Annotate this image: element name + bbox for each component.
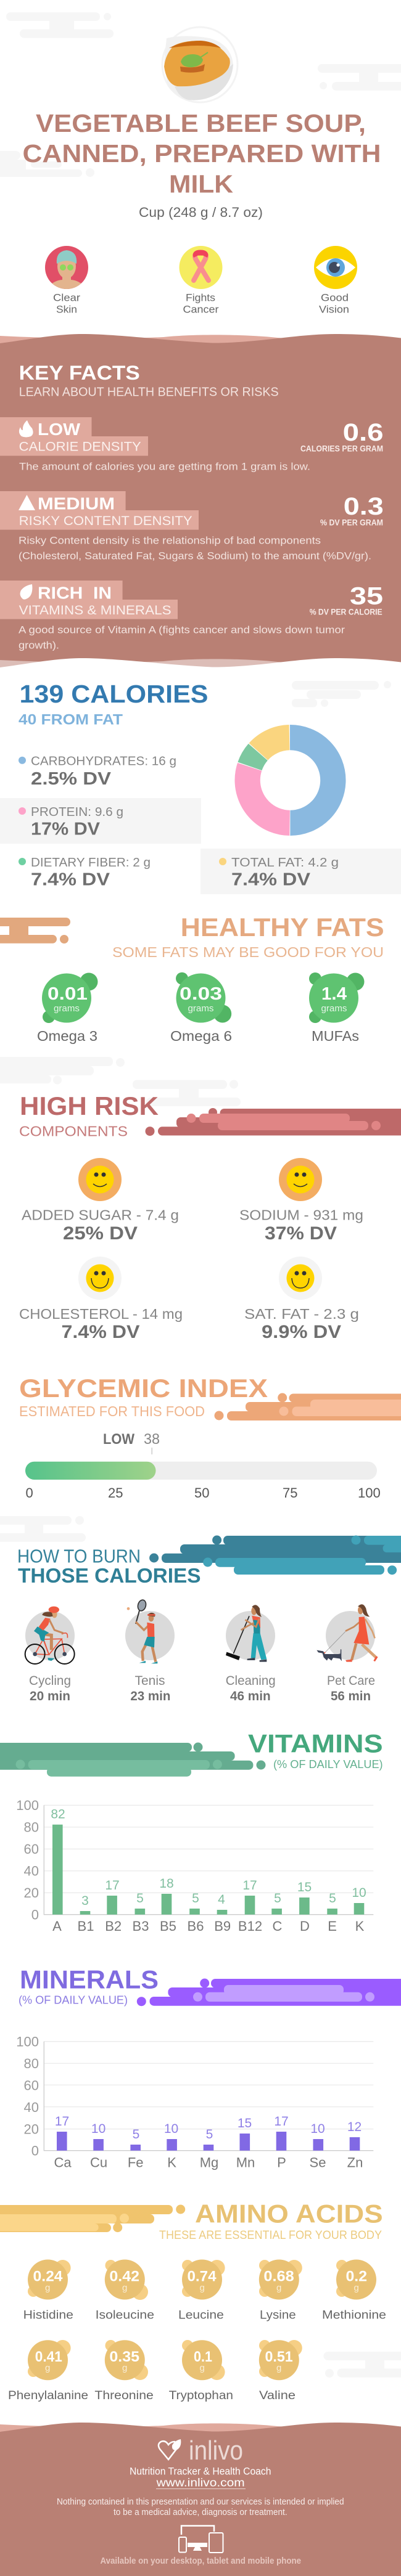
bar values: 5 [192, 1891, 199, 1906]
bar values: 5 [206, 2127, 213, 2142]
category labels [54, 2155, 363, 2170]
bar values: 82 [51, 1808, 65, 1822]
fact: low calorie density: The amount of calories you are getting from 1 gram is low. [19, 461, 310, 472]
lysine: g [276, 2283, 281, 2293]
panel: footer [0, 2423, 401, 2576]
omega 6 bubble [170, 972, 232, 1044]
label: pet care: 56 min [331, 1689, 371, 1703]
isoleucine: g [122, 2283, 127, 2293]
figure: pet care [316, 1604, 378, 1662]
category labels: B6 [188, 1918, 204, 1934]
bar values: 17 [274, 2114, 289, 2129]
bar values: 10 [164, 2122, 178, 2136]
risk: sodium [239, 1158, 363, 1244]
valine: Valine [259, 2389, 296, 2402]
category labels: C [272, 1918, 282, 1934]
vitamins bar chart [16, 1798, 373, 1934]
website: www.inlivo.com [156, 2476, 245, 2488]
panel: glycemic index [19, 1374, 401, 1501]
lysine [259, 2259, 302, 2322]
valine [259, 2340, 302, 2402]
disclaimer: to be a medical advice, diagnosis or treatment. [114, 2508, 287, 2517]
subheading: ESTIMATED FOR THIS FOOD [19, 1403, 205, 1419]
category labels: Ca [54, 2155, 72, 2170]
phenylalanine: Phenylalanine [8, 2389, 88, 2402]
heading: THOSE CALORIES [18, 1564, 201, 1587]
isoleucine: Isoleucine [96, 2309, 154, 2322]
omega 3 bubble [37, 972, 97, 1044]
bar values: 18 [159, 1877, 174, 1891]
fact: low calorie density: CALORIE DENSITY [19, 439, 141, 454]
methionine: 0.2 [345, 2268, 367, 2285]
mufas bubble: grams [321, 1003, 347, 1014]
panel: key facts [0, 334, 401, 675]
mufas bubble: 1.4 [321, 984, 347, 1004]
fact: rich in vitamins and minerals: % DV PER CALORIE [310, 608, 382, 616]
lysine: Lysine [260, 2309, 296, 2322]
omega 6 bubble: 0.03 [180, 984, 222, 1004]
gauge axis: 25 [108, 1485, 123, 1501]
threonine: g [122, 2363, 127, 2373]
label: pet care [327, 1674, 375, 1703]
label: cycling: Cycling [29, 1674, 71, 1688]
label: good vision [319, 293, 349, 316]
soup bowl image [162, 27, 238, 102]
icon: eye [314, 246, 357, 289]
logo [159, 2435, 243, 2466]
risk: cholesterol: 7.4% DV [62, 1322, 139, 1342]
icon: warning triangle [19, 495, 35, 510]
calories cloud [292, 681, 391, 707]
heading: minerals: MINERALS [20, 1965, 159, 1994]
subheading: components: COMPONENTS [19, 1123, 128, 1139]
subheading: (% OF DAILY VALUE) [19, 1994, 128, 2007]
legend: carbohydrates [19, 755, 176, 789]
gauge axis [26, 1485, 381, 1501]
category labels: B1 [78, 1918, 94, 1934]
burn decoration [149, 1536, 401, 1575]
threonine [94, 2340, 154, 2402]
bar values: 17 [105, 1878, 120, 1893]
fact: medium risky content density: (Cholesterol, Saturated Fat, Sugars & Sodium) to the amount (%DV/gr). [19, 550, 371, 562]
lysine: 0.68 [263, 2268, 294, 2285]
figure: cleaning [226, 1605, 275, 1662]
fact: low calorie density: LOW [38, 420, 81, 439]
legend: total fat [219, 856, 339, 890]
phenylalanine: 0.41 [35, 2349, 62, 2365]
y axis labels: 40 [24, 2100, 39, 2115]
gauge axis: 75 [283, 1485, 297, 1501]
risk: added sugar [22, 1158, 179, 1244]
disclaimer [57, 2497, 344, 2517]
legend: dietary fiber [19, 856, 151, 890]
bar values: 3 [81, 1894, 89, 1908]
bar values [55, 2114, 362, 2142]
healthy fats decoration [0, 918, 70, 944]
vitamins decoration [0, 1743, 265, 1777]
gauge [25, 1448, 377, 1480]
category labels: Se [310, 2155, 326, 2170]
tryptophan: Tryptophan [169, 2389, 233, 2402]
gauge label: LOW [103, 1431, 134, 1448]
bar values: 10 [91, 2122, 105, 2136]
category labels: B12 [238, 1918, 262, 1934]
icon: devices [179, 2525, 223, 2553]
heading: amino acids: AMINO ACIDS [195, 2199, 383, 2228]
leucine: 0.74 [188, 2268, 217, 2285]
leucine [178, 2259, 225, 2322]
fact: low calorie density [0, 417, 384, 472]
y axis labels: 0 [31, 2143, 39, 2158]
high risk background clouds [0, 1057, 241, 1106]
category labels: B3 [133, 1918, 149, 1934]
risk: cholesterol [19, 1257, 183, 1342]
y axis labels [16, 2034, 39, 2158]
y axis labels: 20 [24, 1885, 39, 1901]
icon: cancer ribbon [179, 246, 222, 289]
title: CANNED, PREPARED WITH [22, 139, 381, 168]
amino decoration [0, 2205, 185, 2232]
label: clear skin: Clear [53, 293, 81, 304]
isoleucine: 0.42 [109, 2268, 139, 2285]
bar values: 15 [238, 2116, 252, 2130]
fact: rich in vitamins and minerals: 35 [350, 582, 383, 609]
risk: added sugar: 25% DV [63, 1223, 138, 1244]
icon: clear skin [44, 246, 89, 291]
subheading: LEARN ABOUT HEALTH BENEFITS OR RISKS [19, 386, 279, 399]
burn cloud [0, 1516, 86, 1542]
fact: rich in vitamins and minerals [0, 581, 383, 651]
figure: cycling [25, 1607, 75, 1664]
bar values: 17 [242, 1878, 257, 1893]
y axis labels: 80 [24, 2056, 39, 2071]
panel: high risk components [0, 1057, 401, 1342]
bar values: 17 [55, 2114, 69, 2129]
panel: healthy fats [0, 913, 384, 1044]
valine: g [276, 2363, 281, 2373]
phenylalanine [8, 2340, 88, 2402]
label: clear skin [53, 293, 81, 316]
isoleucine [96, 2259, 154, 2322]
methionine: g [354, 2283, 359, 2293]
heading: glycemic index: GLYCEMIC INDEX [19, 1374, 268, 1403]
leucine: Leucine [178, 2309, 224, 2322]
tagline: Nutrition Tracker & Health Coach [130, 2465, 271, 2477]
label: fights cancer: Fights [186, 293, 215, 304]
category labels: Zn [347, 2155, 363, 2170]
legend: total fat: 7.4% DV [231, 870, 311, 890]
label: clear skin: Skin [56, 304, 77, 316]
panel: vitamins [0, 1729, 383, 1934]
icon: flame [19, 420, 33, 438]
fact: medium risky content density: Risky Content density is the relationship of bad components [19, 535, 321, 546]
leaf [181, 54, 203, 67]
fact: medium risky content density: MEDIUM [38, 494, 115, 513]
bar values: 4 [218, 1893, 225, 1907]
y axis labels: 100 [16, 1798, 39, 1813]
y axis labels: 40 [24, 1864, 39, 1878]
omega 6 bubble: Omega 6 [170, 1028, 232, 1044]
label: cleaning: 46 min [230, 1689, 271, 1703]
heading: high risk: HIGH RISK [20, 1091, 159, 1120]
subheading: THESE ARE ESSENTIAL FOR YOUR BODY [159, 2229, 382, 2242]
heading [17, 1546, 201, 1587]
y axis labels: 0 [31, 1907, 39, 1923]
subheading: (% OF DAILY VALUE) [273, 1758, 383, 1771]
label: tenis [130, 1674, 170, 1703]
icon: leaf [20, 584, 32, 600]
risk: saturated fat: SAT. FAT - 2.3 g [244, 1306, 359, 1322]
bar values: 15 [297, 1880, 312, 1894]
methionine [322, 2259, 386, 2322]
y axis labels [16, 1798, 39, 1923]
omega 3 bubble: Omega 3 [37, 1028, 97, 1044]
legend: protein [19, 805, 123, 839]
fact: rich in vitamins and minerals: growth). [19, 640, 59, 651]
valine: 0.51 [265, 2349, 293, 2365]
category labels: A [52, 1918, 62, 1934]
gauge label: 38 [144, 1431, 160, 1448]
bar values [51, 1808, 366, 1908]
category labels: Fe [128, 2155, 144, 2170]
bars [52, 1825, 364, 1915]
label: cleaning [226, 1674, 276, 1703]
tryptophan: g [200, 2363, 205, 2373]
minerals decoration [137, 1978, 401, 2006]
label: cleaning: Cleaning [226, 1674, 276, 1688]
panel: amino acids [0, 2199, 401, 2402]
label: good vision: Good [321, 293, 349, 304]
methionine: Methionine [322, 2309, 386, 2322]
fact: medium risky content density [0, 491, 384, 562]
bar values: 5 [274, 1891, 281, 1906]
tryptophan: 0.1 [194, 2349, 212, 2365]
benefits row [44, 246, 357, 316]
gauge label [103, 1431, 160, 1448]
heading: healthy fats: HEALTHY FATS [181, 913, 384, 942]
leucine: g [200, 2283, 205, 2293]
risk: saturated fat: 9.9% DV [262, 1322, 341, 1342]
gauge axis: 0 [26, 1485, 33, 1501]
legend: total fat: TOTAL FAT: 4.2 g [231, 856, 339, 870]
subheading: from fat: 40 FROM FAT [19, 711, 123, 728]
disclaimer: Nothing contained in this presentation and our services is intended or implied [57, 2497, 344, 2507]
donut chart [247, 738, 333, 823]
bar values: 5 [133, 2127, 139, 2142]
omega 3 bubble: grams [54, 1003, 80, 1014]
omega 3 bubble: 0.01 [48, 984, 88, 1004]
panel: calories [0, 680, 401, 894]
label: fights cancer: Cancer [183, 304, 219, 316]
mufas bubble: MUFAs [312, 1028, 359, 1044]
risk: sodium: SODIUM - 931 mg [239, 1207, 363, 1223]
grid [44, 1805, 373, 1893]
heading: HOW TO BURN [17, 1546, 141, 1567]
label: tenis: 23 min [130, 1689, 170, 1703]
y axis labels: 60 [24, 2077, 39, 2093]
histidine: Histidine [23, 2309, 73, 2322]
histidine [23, 2259, 73, 2322]
label: cycling [29, 1674, 71, 1703]
legend: dietary fiber: 7.4% DV [31, 870, 110, 890]
bar values: 5 [136, 1891, 144, 1906]
category labels: E [328, 1918, 337, 1934]
heading: vitamins: VITAMINS [248, 1729, 383, 1758]
grid [44, 2042, 373, 2129]
title [22, 109, 381, 198]
legend: protein: 17% DV [31, 820, 101, 839]
bar values: 12 [347, 2120, 362, 2134]
header background clouds [0, 12, 401, 177]
fact: rich in vitamins and minerals: A good source of Vitamin A (fights cancer and slows down tumor [19, 624, 345, 636]
label: good vision: Vision [319, 304, 349, 316]
fact: low calorie density: 0.6 [343, 419, 384, 446]
heading: calories: 139 CALORIES [20, 680, 208, 708]
fact: low calorie density: CALORIES PER GRAM [300, 444, 383, 454]
label: fights cancer [183, 293, 219, 316]
bar values: 5 [329, 1891, 336, 1906]
logo: inlivo [189, 2435, 243, 2466]
legend: protein: PROTEIN: 9.6 g [31, 805, 123, 819]
legend: carbohydrates: CARBOHYDRATES: 16 g [31, 755, 176, 768]
risk: cholesterol: CHOLESTEROL - 14 mg [19, 1306, 183, 1322]
fact: medium risky content density: RISKY CONTENT DENSITY [19, 514, 192, 528]
tryptophan [169, 2340, 233, 2402]
histidine: g [45, 2283, 50, 2293]
phenylalanine: g [45, 2363, 50, 2373]
title: MILK [169, 170, 233, 198]
serving size: Cup (248 g / 8.7 oz) [139, 205, 263, 220]
gauge axis: 50 [194, 1485, 209, 1501]
legend: dietary fiber: DIETARY FIBER: 2 g [31, 856, 151, 870]
legend boxes [0, 798, 401, 894]
glycemic decoration [215, 1393, 401, 1420]
y axis labels: 60 [24, 1841, 39, 1857]
fact: medium risky content density: % DV PER GRAM [320, 518, 383, 528]
bars [57, 2132, 360, 2151]
category labels: P [277, 2155, 286, 2170]
bar values: 10 [352, 1886, 366, 1900]
risk: saturated fat [244, 1257, 359, 1342]
label: tenis: Tenis [134, 1674, 165, 1688]
category labels: Mn [236, 2155, 255, 2170]
label: pet care: Pet Care [327, 1674, 375, 1688]
category labels: K [355, 1918, 365, 1934]
histidine: 0.24 [33, 2268, 63, 2285]
category labels: Mg [200, 2155, 218, 2170]
high risk decoration [146, 1108, 401, 1136]
figure: tennis [125, 1599, 175, 1663]
fact: rich in vitamins and minerals: RICH IN [38, 583, 112, 602]
bottom wave [0, 658, 401, 675]
panel: minerals [16, 1965, 401, 2170]
panel: how to burn those calories [0, 1516, 401, 1703]
risk: added sugar: ADDED SUGAR - 7.4 g [22, 1207, 179, 1223]
omega 6 bubble: grams [188, 1003, 213, 1014]
fact: medium risky content density: 0.3 [344, 493, 384, 520]
label: cycling: 20 min [30, 1689, 70, 1703]
threonine: 0.35 [109, 2349, 139, 2365]
category labels: B2 [105, 1918, 122, 1934]
category labels: D [300, 1918, 310, 1934]
mufas bubble [309, 972, 364, 1044]
gauge axis: 100 [358, 1485, 381, 1501]
subheading: SOME FATS MAY BE GOOD FOR YOU [112, 944, 384, 960]
category labels [52, 1918, 365, 1934]
minerals bar chart [16, 2034, 373, 2170]
y axis labels: 20 [24, 2121, 39, 2137]
y axis labels: 80 [24, 1819, 39, 1835]
category labels: K [167, 2155, 176, 2170]
category labels: B5 [160, 1918, 176, 1934]
fact: rich in vitamins and minerals: VITAMINS & MINERALS [19, 603, 172, 618]
y axis labels: 100 [16, 2034, 39, 2049]
legend: carbohydrates: 2.5% DV [31, 769, 112, 789]
threonine: Threonine [94, 2389, 154, 2402]
heading: key facts: KEY FACTS [19, 362, 140, 384]
bar values: 10 [310, 2122, 325, 2136]
category labels: B9 [214, 1918, 231, 1934]
title: VEGETABLE BEEF SOUP, [36, 109, 366, 137]
risk: sodium: 37% DV [265, 1223, 337, 1244]
amino cloud [323, 2352, 401, 2378]
category labels: Cu [90, 2155, 107, 2170]
availability note: Available on your desktop, tablet and mobile phone [100, 2556, 301, 2566]
